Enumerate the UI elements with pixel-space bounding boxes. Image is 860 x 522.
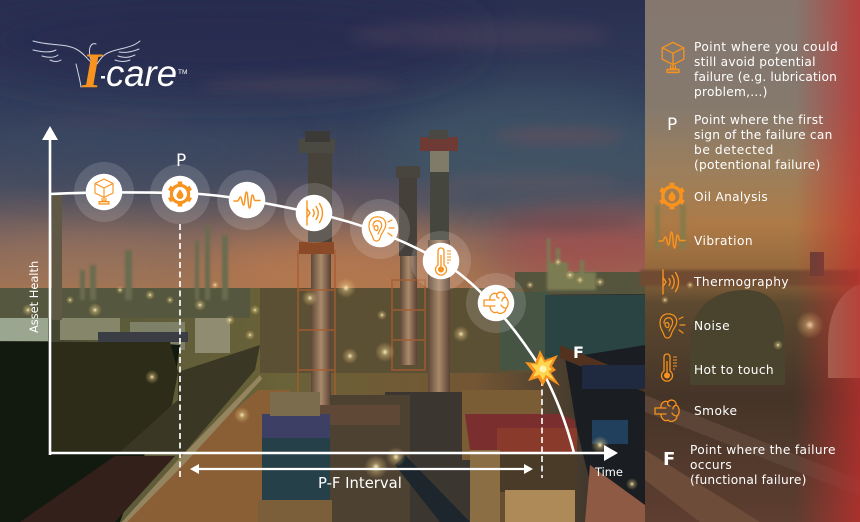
legend: smoke [655, 400, 737, 421]
P-F chart [27, 126, 623, 492]
y axis arrowhead [42, 126, 58, 140]
logo: bird wings [33, 41, 140, 87]
plant lights [22, 258, 638, 490]
legend: hot to touch: Hot to touch [694, 363, 774, 377]
refinery stacks [311, 240, 331, 410]
P label: P [176, 151, 186, 171]
legend: P point: (potentional failure) [694, 158, 821, 172]
legend: vibration: Vibration [694, 234, 753, 248]
failure curve [50, 192, 574, 453]
node: inspection box [74, 162, 134, 222]
buildings bottom centre [262, 415, 330, 522]
central pipework [385, 392, 485, 522]
legend: smoke: Smoke [694, 404, 737, 418]
P dashed line [179, 224, 181, 478]
right lower plant area [565, 345, 645, 522]
ground [0, 288, 860, 522]
node: oil analysis [150, 164, 210, 224]
logo: orange I: I [81, 42, 103, 98]
x axis [49, 452, 606, 454]
legend: noise: Noise [694, 319, 730, 333]
legend: thermography: Thermography [693, 275, 789, 289]
y axis label: Asset Health [27, 261, 41, 333]
legend: F point: (functional failure) [690, 473, 807, 487]
logo [33, 41, 187, 98]
node: noise [350, 199, 410, 259]
legend: F point [663, 443, 836, 487]
y axis [49, 135, 51, 455]
x axis label: Time [594, 465, 623, 479]
legend: noise [660, 314, 730, 338]
legend: P point [667, 113, 833, 172]
F label: F [573, 343, 584, 362]
legend: avoid point [662, 40, 838, 99]
right legend panel background [640, 0, 860, 522]
orange scaffolding [298, 250, 425, 395]
node: vibration [217, 170, 277, 230]
legend: avoid point: still avoid potential [694, 55, 816, 69]
legend: hot to touch [662, 354, 774, 381]
icon: failure explosion [525, 350, 560, 386]
road and sidewalk [120, 345, 260, 452]
legend: avoid point: problem,...) [694, 85, 768, 99]
logo: wordmark: care [106, 53, 177, 94]
node: smoke [466, 273, 526, 333]
legend: avoid point: failure (e.g. lubrication [694, 70, 837, 84]
node: thermography [284, 183, 344, 243]
legend: P point: sign of the failure can [694, 128, 833, 142]
legend: oil analysis [660, 183, 768, 209]
horizon structures [0, 272, 645, 318]
F dashed line [541, 380, 543, 478]
legend: F point: F [663, 449, 675, 470]
left stack [52, 195, 62, 320]
legend: F point: occurs [690, 458, 732, 472]
legend: vibration [659, 232, 753, 248]
legend [655, 40, 838, 487]
legend: avoid point: Point where you could [694, 40, 838, 54]
legend: P point: be detected [694, 143, 774, 157]
trees [0, 342, 180, 522]
legend: P point: Point where the first [694, 113, 823, 127]
legend: thermography [663, 270, 789, 294]
node: hot to touch [411, 231, 471, 291]
legend: oil analysis: Oil Analysis [694, 190, 768, 204]
logo: hyphen [101, 76, 105, 78]
legend: P point: P [667, 115, 677, 135]
P-F interval label: P-F Interval [318, 475, 402, 492]
x axis arrowhead [604, 445, 618, 461]
logo: trademark: TM [178, 69, 187, 76]
legend: F point: Point where the failure [690, 443, 836, 457]
P-F interval arrow [190, 464, 533, 474]
